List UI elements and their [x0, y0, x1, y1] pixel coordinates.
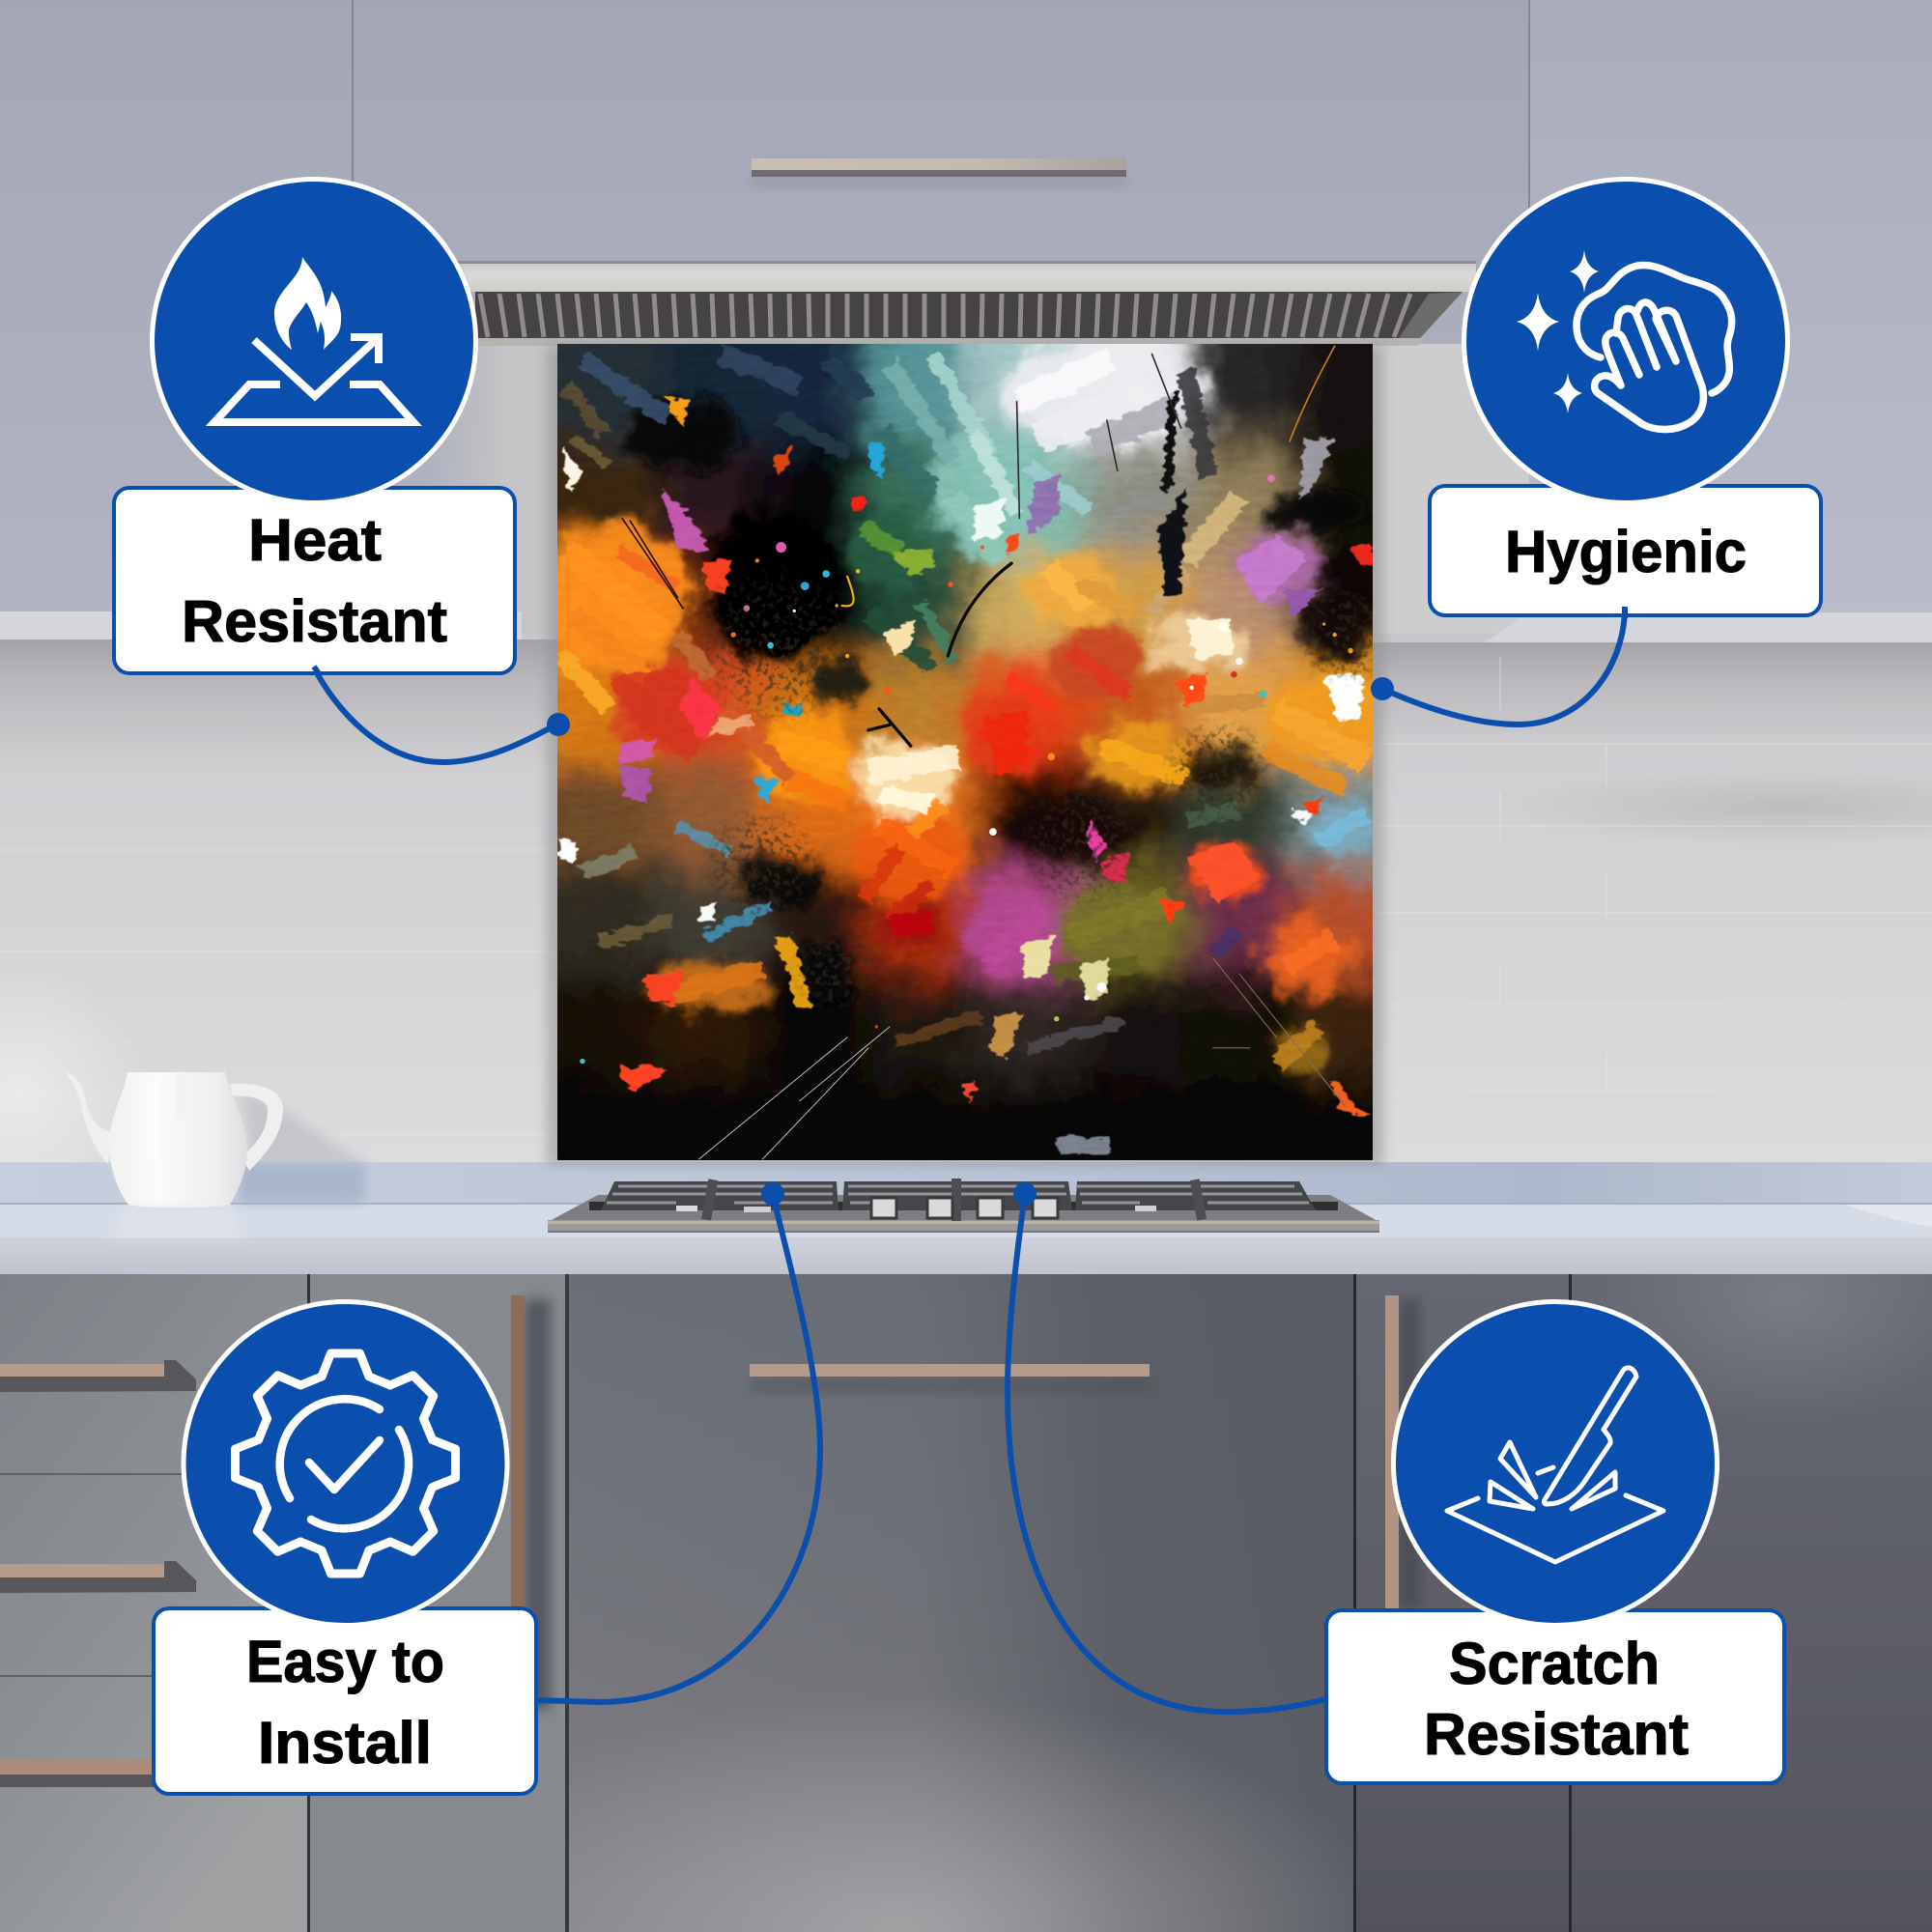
connector: Hygienic to panel — [1371, 611, 1625, 724]
panel: abstract painting splashback — [497, 285, 1451, 1238]
label box: Heat Resistant: Resistant — [182, 588, 447, 654]
tiled wall — [0, 344, 1932, 1217]
label box: Scratch Resistant: Resistant — [1424, 1701, 1689, 1767]
right wall cabinet bottom edge — [1485, 612, 1932, 642]
label box: Scratch Resistant — [1326, 1610, 1784, 1783]
callout: Heat Resistant — [114, 180, 515, 675]
palette knife scratches — [622, 346, 1346, 1159]
callout: Scratch Resistant — [1326, 1302, 1784, 1783]
backsplash ledge and counter — [0, 1162, 1932, 1274]
paint patches — [558, 391, 1373, 1154]
brush strokes — [561, 354, 1367, 1064]
cabinet handle top — [752, 158, 1126, 187]
splashback shadow — [547, 346, 1383, 1165]
upper cabinets — [0, 0, 1932, 618]
label box: Heat Resistant: Heat — [248, 507, 382, 573]
icon: knife scratching a surface — [1393, 1302, 1718, 1625]
label box: Hygienic — [1430, 486, 1821, 618]
gas cooktop — [548, 1179, 1379, 1233]
icon: wiping hand and sparkles — [1464, 180, 1787, 502]
fine brush texture — [551, 338, 1381, 1169]
connector: Easy to Install to hob — [537, 1182, 820, 1702]
teapot — [66, 1072, 367, 1208]
extractor hood — [458, 261, 1476, 346]
label box: Easy to Install — [154, 1608, 536, 1794]
callout: Hygienic — [1430, 180, 1821, 618]
label box: Hygienic: Hygienic — [1505, 519, 1747, 584]
icon: gear with check mark — [184, 1302, 507, 1625]
lower cabinets — [0, 1274, 1932, 1932]
label box: Scratch Resistant: Scratch — [1449, 1631, 1660, 1696]
icon: flame over heat-deflecting surface — [153, 180, 475, 502]
drawer handles — [0, 1295, 1420, 1787]
callout: Easy to Install — [154, 1302, 536, 1794]
left wall cabinet bottom edge — [0, 611, 522, 639]
label box: Easy to Install: Easy to — [246, 1629, 444, 1694]
label box: Heat Resistant — [114, 488, 515, 675]
dark spatter clusters — [551, 338, 1381, 1169]
paint splatter dots — [580, 474, 1353, 1064]
connector: Scratch Resistant to hob — [1008, 1182, 1325, 1712]
connector: Heat Resistant to panel — [314, 668, 570, 762]
label box: Easy to Install: Install — [258, 1710, 432, 1776]
